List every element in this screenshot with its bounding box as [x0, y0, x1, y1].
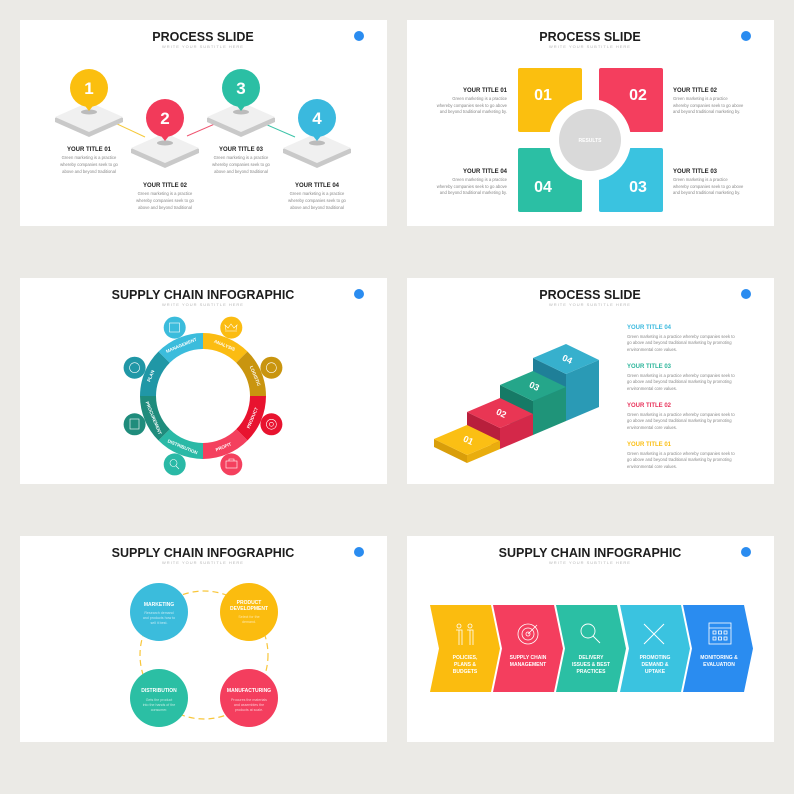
text 2: Green marketing is a practice — [138, 191, 193, 196]
text 03 — [673, 169, 744, 195]
text 03: YOUR TITLE 03 — [673, 169, 718, 175]
distribution: Gets the product — [146, 698, 172, 702]
quadrants: RESULTS — [579, 138, 602, 144]
text 01: Green marketing is a practice — [452, 96, 508, 101]
text 02: and beyond traditional marketing by. — [673, 109, 740, 114]
heading: WRITE YOUR SUBTITLE HERE — [549, 44, 631, 49]
heading: PROCESS SLIDE — [539, 30, 641, 44]
text 04: go above and beyond traditional marketing by promoting — [627, 340, 732, 345]
marketing: Research demand — [144, 611, 174, 615]
text 02 — [673, 88, 744, 114]
manufacturing: and assembles the — [234, 703, 264, 707]
ring labels: ANALYSIS — [213, 339, 236, 352]
stairs: 02 — [495, 407, 508, 420]
product development: Select for the — [238, 615, 260, 619]
chevron 1 — [430, 605, 500, 692]
text 4: above and beyond traditional — [290, 205, 344, 210]
text 1 — [60, 147, 119, 174]
chevron 5: EVALUATION — [703, 662, 735, 668]
text 01 — [627, 442, 735, 469]
stairs: 01 — [462, 434, 475, 447]
box 01 — [434, 439, 467, 463]
chevron 4: DEMAND & — [642, 662, 669, 668]
heading: WRITE YOUR SUBTITLE HERE — [549, 302, 631, 307]
text 01: Green marketing is a practice whereby companies seek to — [627, 451, 735, 456]
text 01: YOUR TITLE 01 — [463, 88, 508, 94]
product development: demand. — [242, 620, 256, 624]
distribution — [130, 669, 188, 727]
text 04: Green marketing is a practice whereby companies seek to — [627, 334, 735, 339]
heading: WRITE YOUR SUBTITLE HERE — [162, 44, 244, 49]
text 04: YOUR TITLE 04 — [463, 169, 508, 175]
ring labels: PROFIT — [215, 441, 232, 452]
text 04 — [627, 325, 735, 352]
text 2: whereby companies seek to go — [136, 198, 195, 203]
text 2: above and beyond traditional — [138, 205, 192, 210]
text 2: YOUR TITLE 02 — [143, 183, 188, 189]
quadrants: 04 — [534, 179, 552, 196]
chevron 5: MONITORING & — [700, 655, 738, 661]
text 02: whereby companies seek to go above — [673, 103, 744, 108]
chevron 3: PRACTICES — [577, 669, 606, 675]
connectors — [115, 123, 295, 137]
slide 5: supply chain circles — [20, 536, 387, 742]
text 1: whereby companies seek to go — [60, 162, 119, 167]
icon circles — [124, 317, 282, 475]
heading: WRITE YOUR SUBTITLE HERE — [162, 560, 244, 565]
heading: WRITE YOUR SUBTITLE HERE — [162, 302, 244, 307]
quadrants: 01 — [534, 87, 552, 104]
chevron 3: ISSUES & BEST — [572, 662, 610, 668]
step 4: 4 — [312, 109, 322, 128]
text 3: Green marketing is a practice — [214, 155, 269, 160]
heading: SUPPLY CHAIN INFOGRAPHIC — [112, 288, 294, 302]
text 04 — [437, 169, 508, 195]
slide 3: supply chain wheel — [20, 278, 387, 484]
quadrants: 02 — [629, 87, 647, 104]
ring labels: PLAN — [146, 369, 155, 383]
page badge — [354, 31, 364, 41]
text 03: and beyond traditional marketing by. — [673, 190, 740, 195]
slide 4: process stairs — [407, 278, 774, 484]
step 3: 3 — [236, 79, 246, 98]
step 2: 2 — [160, 109, 170, 128]
text 3: whereby companies seek to go — [212, 162, 271, 167]
text 03: Green marketing is a practice whereby companies seek to — [627, 373, 735, 378]
text 03: whereby companies seek to go above — [673, 184, 744, 189]
text 3 — [212, 147, 271, 174]
manufacturing: products at scale. — [235, 708, 263, 712]
text 02: go above and beyond traditional marketing by promoting — [627, 418, 732, 423]
marketing: sell it best. — [151, 621, 167, 625]
box 02 — [467, 412, 500, 449]
quadrants — [518, 68, 663, 212]
ring labels: DISTRIBUTION — [167, 438, 198, 455]
text 02: Green marketing is a practice — [673, 96, 728, 101]
marketing: and products how to — [143, 616, 175, 620]
step 2 — [131, 99, 199, 168]
chevron 2: SUPPLY CHAIN — [510, 655, 547, 661]
chevron 1: BUDGETS — [453, 669, 478, 675]
distribution: into the hands of the — [143, 703, 175, 707]
chevron 4 — [620, 605, 690, 692]
text 3: YOUR TITLE 03 — [219, 147, 264, 153]
slide 1: process slide pins — [20, 20, 387, 226]
dashed ring — [140, 591, 268, 719]
text 1: above and beyond traditional — [62, 169, 116, 174]
text 02: YOUR TITLE 02 — [627, 403, 672, 409]
text 03 — [627, 364, 735, 391]
quadrants: 03 — [629, 179, 647, 196]
marketing — [130, 583, 188, 641]
text 03: go above and beyond traditional marketing by promoting — [627, 379, 732, 384]
text 02: YOUR TITLE 02 — [673, 88, 718, 94]
text 4: whereby companies seek to go — [288, 198, 347, 203]
manufacturing: Procures the materials — [231, 698, 267, 702]
manufacturing: MANUFACTURING — [227, 688, 271, 694]
text 4: YOUR TITLE 04 — [295, 183, 340, 189]
heading: PROCESS SLIDE — [152, 30, 254, 44]
text 1: Green marketing is a practice — [62, 155, 117, 160]
box 03 — [500, 385, 533, 435]
product development: DEVELOPMENT — [230, 606, 268, 612]
product development: PRODUCT — [237, 600, 261, 606]
text 03: Green marketing is a practice — [673, 177, 728, 182]
text 01 — [437, 88, 508, 114]
text 04: Green marketing is a practice — [452, 177, 508, 182]
ring labels: PRODUCT — [246, 406, 259, 429]
stairs — [434, 344, 599, 463]
heading: SUPPLY CHAIN INFOGRAPHIC — [112, 546, 294, 560]
text 03: environmental core values. — [627, 386, 677, 391]
chevron 4: PROMOTING — [640, 655, 671, 661]
step 3 — [207, 69, 275, 137]
page badge — [354, 547, 364, 557]
step 4 — [283, 99, 351, 168]
page badge — [741, 289, 751, 299]
text 04: environmental core values. — [627, 347, 677, 352]
text 04: and beyond traditional marketing by. — [440, 190, 507, 195]
text 03: YOUR TITLE 03 — [627, 364, 672, 370]
ring labels — [145, 337, 262, 455]
text 01: YOUR TITLE 01 — [627, 442, 672, 448]
page badge — [741, 547, 751, 557]
ring segments — [140, 333, 266, 459]
box 04 — [533, 358, 566, 421]
chevron 1: PLANS & — [454, 662, 476, 668]
step 1 — [55, 69, 123, 137]
text 1: YOUR TITLE 01 — [67, 147, 112, 153]
text 04: whereby companies seek to go above — [437, 184, 508, 189]
text 4 — [288, 183, 347, 210]
stairs: 03 — [528, 380, 541, 393]
chevron 3 — [556, 605, 626, 692]
page badge — [741, 31, 751, 41]
heading: PROCESS SLIDE — [539, 288, 641, 302]
text 02 — [627, 403, 735, 430]
text 4: Green marketing is a practice — [290, 191, 345, 196]
text 04: YOUR TITLE 04 — [627, 325, 672, 331]
marketing: MARKETING — [144, 602, 174, 608]
distribution: DISTRIBUTION — [141, 688, 177, 694]
text 02: Green marketing is a practice whereby companies seek to — [627, 412, 735, 417]
chevron 2: MANAGEMENT — [510, 662, 546, 668]
manufacturing — [220, 669, 278, 727]
step 1: 1 — [84, 79, 94, 98]
text 01: and beyond traditional marketing by. — [440, 109, 507, 114]
stairs: 04 — [561, 353, 574, 366]
chevron 2 — [493, 605, 563, 692]
page badge — [354, 289, 364, 299]
text 2 — [136, 183, 195, 210]
ring labels: MANAGEMENT — [165, 337, 198, 354]
text 02: environmental core values. — [627, 425, 677, 430]
chevron 4: UPTAKE — [645, 669, 666, 675]
chevron 5 — [683, 605, 753, 692]
heading: WRITE YOUR SUBTITLE HERE — [549, 560, 631, 565]
distribution: consumer. — [151, 708, 167, 712]
ring labels: PROCUREMENT — [145, 401, 163, 435]
text 01: go above and beyond traditional marketing by promoting — [627, 457, 732, 462]
text 3: above and beyond traditional — [214, 169, 268, 174]
text 01: whereby companies seek to go above — [437, 103, 508, 108]
slide 2: process slide quadrants — [407, 20, 774, 226]
chevron 1: POLICIES, — [453, 655, 478, 661]
text 01: environmental core values. — [627, 464, 677, 469]
product development — [220, 583, 278, 641]
heading: SUPPLY CHAIN INFOGRAPHIC — [499, 546, 681, 560]
chevron 3: DELIVERY — [579, 655, 604, 661]
slide 6: supply chain chevrons — [407, 536, 774, 742]
ring labels: LOGISTIC — [249, 365, 262, 387]
